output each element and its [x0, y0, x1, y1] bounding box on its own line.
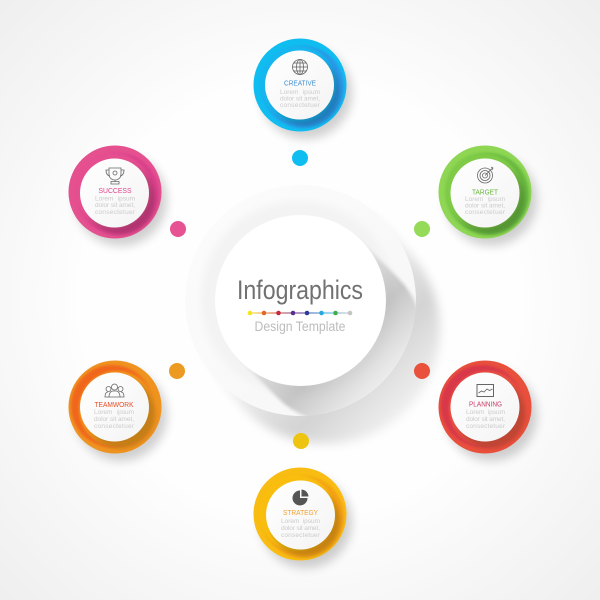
icon: chart — [477, 384, 494, 396]
text block: dolor sit amet, — [466, 416, 505, 423]
text block: dolor sit amet, — [465, 202, 505, 210]
heading: TEAMWORK — [94, 400, 134, 409]
icon: target — [478, 167, 493, 183]
text block: ipsum — [117, 409, 134, 416]
colored dots line — [248, 311, 352, 315]
text block — [466, 409, 506, 430]
text block: consectetuer — [95, 209, 136, 216]
text block: Lorem — [465, 196, 483, 203]
panel: creative — [254, 38, 352, 139]
text block: consectetuer — [466, 423, 506, 430]
text block: Lorem — [281, 518, 299, 525]
text block: dolor sit amet, — [95, 202, 135, 209]
hub subtitle: Design Template — [254, 318, 346, 334]
text block — [95, 196, 136, 216]
text block: ipsum — [488, 196, 505, 203]
panel: success — [68, 146, 167, 246]
text block: ipsum — [303, 518, 320, 525]
text block: consectetuer — [281, 532, 321, 539]
icon: globe — [292, 60, 308, 74]
text block: Lorem — [280, 89, 298, 96]
connector dot: strategy — [293, 433, 309, 449]
text block: ipsum — [303, 89, 320, 96]
text block: dolor sit amet, — [281, 525, 320, 532]
heading: PLANNING — [469, 400, 502, 408]
heading: TARGET — [472, 188, 498, 196]
text block — [465, 196, 506, 216]
heading: CREATIVE — [284, 78, 316, 88]
panel: teamwork — [68, 360, 167, 461]
text block — [94, 409, 135, 430]
panel: planning — [438, 360, 537, 461]
text block — [281, 518, 321, 539]
connector dot: success — [170, 221, 186, 237]
text block: ipsum — [488, 409, 505, 416]
text block: dolor sit amet, — [94, 416, 134, 423]
central hub — [185, 185, 416, 416]
text block — [280, 89, 321, 109]
connector dot: planning — [414, 363, 430, 379]
panel: strategy — [254, 468, 352, 568]
connector dot: teamwork — [169, 363, 185, 379]
text block: dolor sit amet, — [280, 96, 320, 102]
icon: pie chart — [293, 490, 308, 506]
connector dot: target — [414, 221, 430, 237]
text block: ipsum — [118, 196, 135, 202]
icon: people — [105, 384, 124, 397]
text block: Lorem — [95, 196, 113, 202]
hub title: Infographics — [237, 275, 363, 305]
text block: Lorem — [94, 409, 112, 416]
panel: target — [438, 146, 537, 246]
text block: consectetuer — [94, 423, 135, 430]
connector dot: creative — [292, 150, 308, 166]
heading: STRATEGY — [283, 508, 318, 517]
text block: consectetuer — [465, 209, 506, 216]
heading: SUCCESS — [98, 186, 132, 195]
icon: trophy — [106, 168, 124, 184]
text block: Lorem — [466, 409, 484, 416]
text block: consectetuer — [280, 102, 321, 109]
